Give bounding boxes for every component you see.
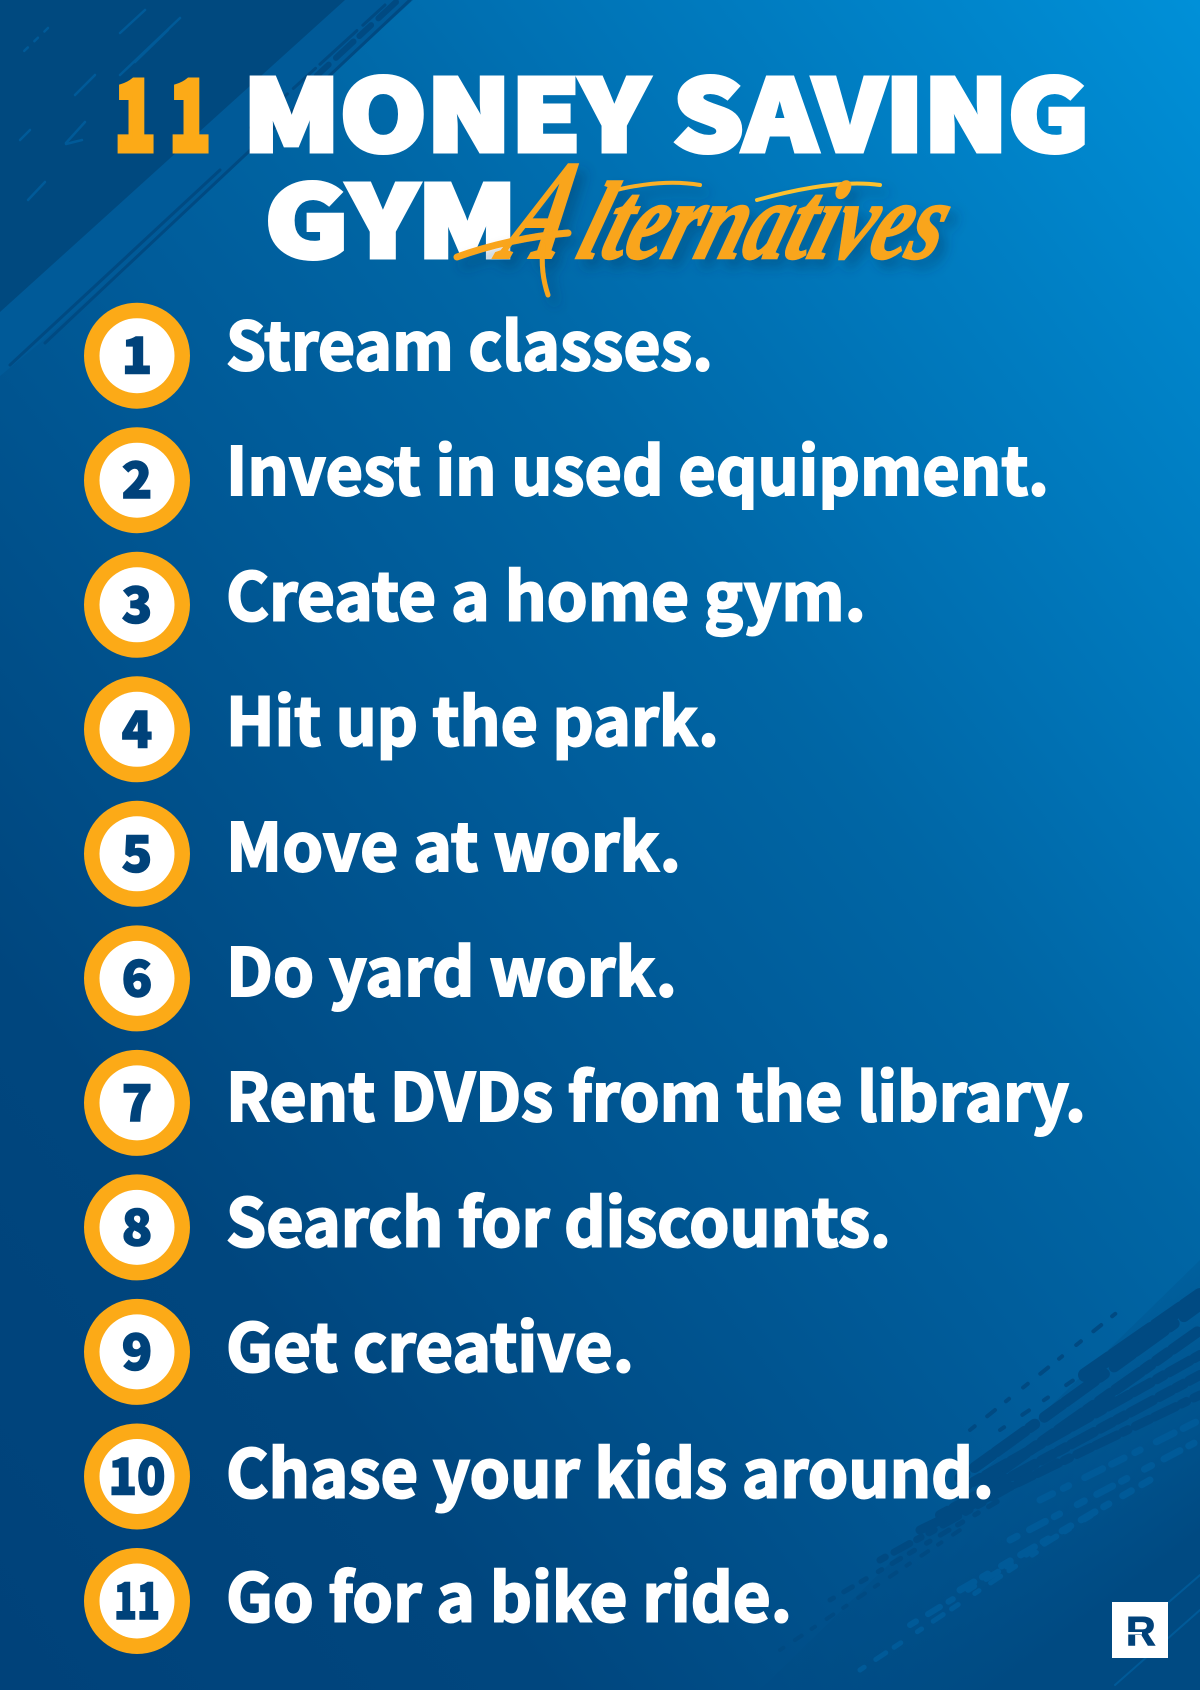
badge 8: 8 [122, 1188, 152, 1260]
badge 2: 2 [122, 441, 152, 513]
item 6 [84, 920, 677, 1031]
text 11: Go for a bike ride. [226, 1546, 792, 1642]
badge 1 [84, 303, 190, 409]
title [114, 38, 1089, 295]
item 7 [84, 1045, 1086, 1156]
logo [1112, 1602, 1168, 1658]
item 5 [84, 795, 681, 907]
title number 11: 1 [114, 38, 156, 180]
text 5: Move at work. [226, 795, 681, 891]
badge 11: 11 [114, 1562, 160, 1634]
title line 2: GYM [265, 144, 517, 286]
title number 11: 1 [169, 38, 211, 180]
text 9: Get creative. [226, 1296, 634, 1392]
badge 7 [84, 1050, 190, 1156]
badge 10 [84, 1424, 190, 1530]
item 9 [84, 1296, 634, 1405]
item 10 [84, 1422, 994, 1530]
item 8 [84, 1170, 891, 1280]
badge 8 [84, 1174, 190, 1280]
text 2: Invest in used equipment. [226, 419, 1049, 515]
badge 3: 3 [122, 566, 152, 638]
title number 11 [114, 38, 211, 180]
text 8: Search for discounts. [226, 1170, 891, 1266]
script word: Alternatives: A [478, 132, 612, 289]
text 3: Create a home gym. [226, 544, 866, 640]
script word: Alternatives: lternatives [566, 160, 968, 282]
logo: R [1126, 1608, 1156, 1654]
item 1 [84, 294, 713, 409]
badge 3 [84, 552, 190, 658]
item 3 [84, 544, 866, 658]
item 2 [84, 419, 1049, 533]
item 11 [84, 1546, 792, 1654]
tips list [84, 294, 1086, 1654]
badge 4 [84, 676, 190, 782]
badge 4: 4 [122, 690, 152, 762]
text 7: Rent DVDs from the library. [226, 1045, 1086, 1141]
badge 7: 7 [122, 1064, 152, 1136]
badge 10: 10 [108, 1438, 166, 1510]
badge 1: 1 [122, 317, 152, 389]
title line 1: MONEY SAVING [243, 38, 1089, 180]
item 4 [84, 670, 719, 782]
script word: Alternatives [457, 132, 968, 295]
badge 6 [84, 925, 190, 1031]
badge 2 [84, 427, 190, 533]
badge 5: 5 [122, 815, 152, 887]
badge 9 [84, 1299, 190, 1405]
badge 5 [84, 801, 190, 907]
text 1: Stream classes. [226, 294, 713, 390]
badge 11 [84, 1548, 190, 1654]
badge 6: 6 [122, 939, 152, 1011]
text 10: Chase your kids around. [226, 1422, 994, 1518]
text 6: Do yard work. [226, 920, 677, 1016]
badge 9: 9 [122, 1313, 152, 1385]
text 4: Hit up the park. [226, 670, 719, 766]
